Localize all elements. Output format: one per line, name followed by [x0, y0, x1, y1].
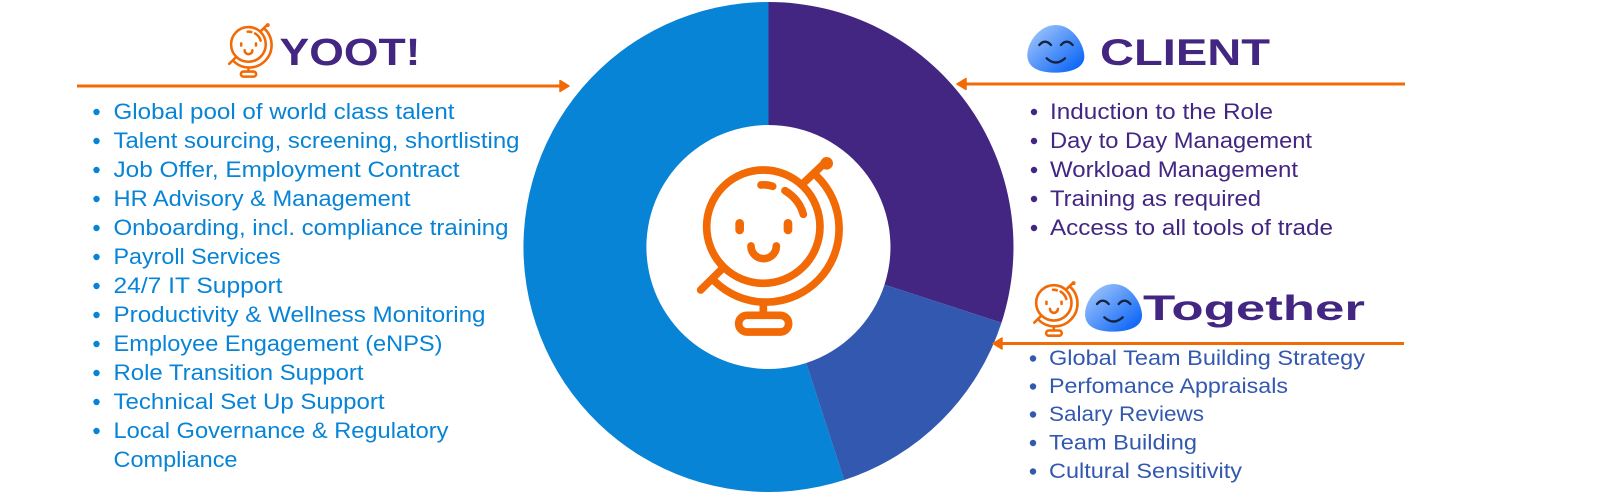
icon: Together globe logo [1034, 282, 1077, 336]
segment: Client 30% [768, 2, 1013, 323]
icon: YOOT globe logo [229, 24, 272, 77]
list: Client responsibilities: Induction to the Role [1050, 99, 1273, 124]
list: YOOT responsibilities: 24/7 IT Support [114, 273, 282, 298]
YOOT wordmark: YOOT! [280, 32, 420, 74]
list: YOOT responsibilities: Onboarding, incl. compliance training [114, 215, 508, 240]
Together heading [1034, 282, 1366, 336]
segment: Together 15% [806, 285, 1002, 480]
list: shared responsibilities [1030, 347, 1366, 483]
list: Client responsibilities: Training as required [1050, 186, 1261, 211]
list: Client responsibilities: Workload Management [1050, 157, 1298, 182]
Together wordmark: Together [1143, 289, 1366, 328]
donut chart [523, 2, 1013, 492]
list: shared responsibilities: Cultural Sensitivity [1049, 460, 1243, 483]
list: Client responsibilities [1031, 99, 1333, 240]
arrow: Client to chart [957, 78, 1405, 90]
list: YOOT responsibilities: Local Governance & Regulatory [114, 418, 448, 443]
list: YOOT responsibilities: Employee Engagement (eNPS) [114, 331, 443, 356]
list: YOOT responsibilities [93, 99, 520, 472]
arrow: Together to chart [993, 338, 1404, 349]
list: YOOT responsibilities: HR Advisory & Management [114, 186, 410, 211]
segment: YOOT 55% [523, 2, 844, 492]
icon: center globe mascot [701, 160, 839, 332]
list: shared responsibilities: Salary Reviews [1049, 403, 1204, 426]
list: YOOT responsibilities: Job Offer, Employment Contract [114, 157, 460, 182]
icon: client blob face [1027, 25, 1084, 73]
list: YOOT responsibilities: Compliance [114, 447, 238, 472]
list: shared responsibilities: Team Building [1049, 432, 1197, 454]
icon: Together blob face [1085, 284, 1142, 332]
list: YOOT responsibilities: Role Transition Support [114, 360, 364, 385]
list: YOOT responsibilities: Talent sourcing, screening, shortlisting [114, 128, 520, 153]
list: shared responsibilities: Perfomance Appraisals [1049, 375, 1288, 398]
list: YOOT responsibilities: Payroll Services [114, 244, 280, 269]
list: YOOT responsibilities: Global pool of world class talent [114, 99, 454, 124]
YOOT heading [229, 24, 420, 77]
list: YOOT responsibilities: Productivity & Wellness Monitoring [114, 302, 485, 327]
CLIENT wordmark: CLIENT [1100, 32, 1270, 73]
list: Client responsibilities: Day to Day Management [1050, 128, 1312, 153]
list: Client responsibilities: Access to all tools of trade [1050, 215, 1333, 240]
list: YOOT responsibilities: Technical Set Up Support [114, 389, 384, 414]
arrow: YOOT to chart [77, 80, 569, 92]
CLIENT heading [1027, 25, 1270, 73]
list: shared responsibilities: Global Team Building Strategy [1049, 347, 1366, 370]
